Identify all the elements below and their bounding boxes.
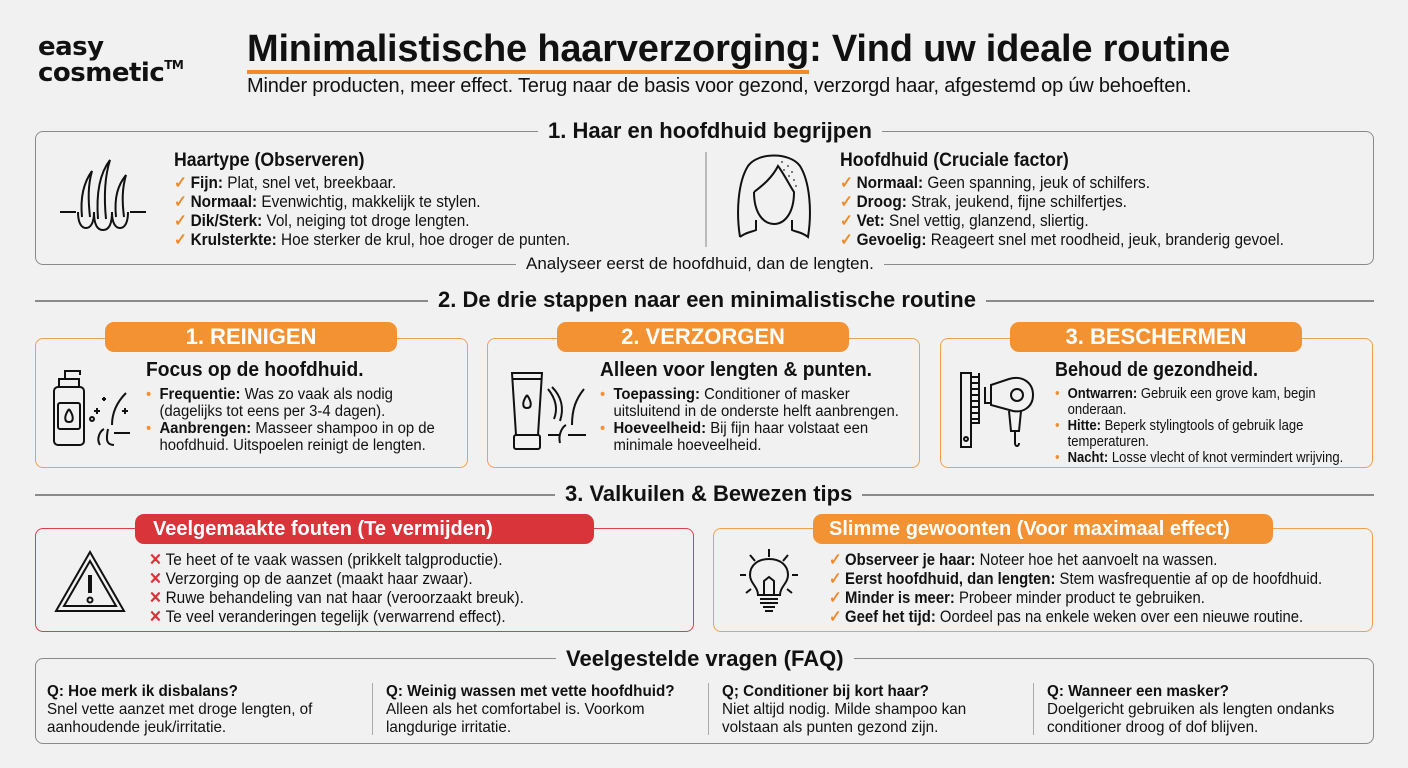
panel: step 1 [35, 338, 468, 468]
faq 3: Q; Conditioner bij kort haar? [722, 683, 929, 700]
list: mistakes: ✕Te veel veranderingen tegelijk (verwarrend effect). [149, 608, 506, 626]
text: haartype: Haartype (Observeren) [174, 150, 365, 171]
text: step 3: temperaturen. [1068, 434, 1149, 450]
title: Minimalistische haarverzorging: Vind uw ideale routine [247, 28, 1230, 70]
faq 4 [1047, 683, 1334, 736]
icon: comb and dryer [960, 372, 1034, 448]
tab: reinigen [105, 322, 397, 352]
text: hoofdhuid: ✓Normaal: Geen spanning, jeuk of schilfers. [840, 174, 1150, 192]
list: mistakes: ✕Te heet of te vaak wassen (prikkelt talgproductie). [149, 551, 503, 569]
faq 2 [386, 683, 675, 736]
text: step 1: (dagelijks tot eens per 3-4 dagen). [159, 403, 385, 420]
text: step 2: uitsluitend in de onderste helft aanbrengen. [613, 403, 899, 420]
icon: shampoo bottle [53, 370, 130, 446]
text: step 3 [1055, 359, 1343, 466]
text: step 2: Hoeveelheid: Bij fijn haar volstaat een [613, 420, 868, 437]
panel: step 3 [940, 338, 1373, 468]
text: step 1: Focus op de hoofdhuid. [146, 359, 364, 381]
list: tips: ✓Geef het tijd: Oordeel pas na enkele weken over een nieuwe routine. [829, 608, 1303, 626]
tab: beschermen [1010, 322, 1302, 352]
faq 4: conditioner droog of dof blijven. [1047, 719, 1258, 736]
text: hoofdhuid [840, 150, 1284, 249]
subtitle: Minder producten, meer effect. Terug naar de basis voor gezond, verzorgd haar, afgestemd op úw behoeften. [247, 75, 1191, 97]
text: step 2: Toepassing: Conditioner of masker [613, 386, 850, 403]
faq 1 [47, 683, 312, 736]
text: haartype [174, 150, 570, 249]
text: step 1: Aanbrengen: Masseer shampoo in op de [159, 420, 435, 437]
text: step 3: Ontwarren: Gebruik een grove kam, begin [1068, 386, 1316, 402]
text: step 2 [600, 359, 899, 454]
text: haartype: ✓Krulsterkte: Hoe sterker de krul, hoe droger de punten. [174, 231, 570, 249]
logo: cosmeticTM [38, 58, 183, 88]
heading: FAQ: Veelgestelde vragen (FAQ) [566, 646, 844, 671]
tab: verzorgen [557, 322, 849, 352]
logo: easy [38, 32, 104, 62]
text: step 1: hoofdhuid. Uitspoelen reinigt de lengten. [159, 437, 426, 454]
logo [38, 32, 183, 88]
text: step 3: Nacht: Losse vlecht of knot vermindert wrijving. [1068, 450, 1343, 466]
list: tips: ✓Eerst hoofdhuid, dan lengten: Stem wasfrequentie af op de hoofdhuid. [829, 570, 1322, 588]
icon: lightbulb [740, 549, 798, 612]
text: step 1 [146, 359, 435, 454]
faq 4: Doelgericht gebruiken als lengten ondanks [1047, 701, 1334, 718]
tab: reinigen: 1. REINIGEN [186, 324, 316, 349]
text: haartype: ✓Fijn: Plat, snel vet, breekbaar. [174, 174, 396, 192]
list: mistakes [149, 551, 524, 626]
faq 1: Q: Hoe merk ik disbalans? [47, 683, 238, 700]
text: hoofdhuid: Hoofdhuid (Cruciale factor) [840, 150, 1069, 171]
list: tips: ✓Minder is meer: Probeer minder product te gebruiken. [829, 589, 1205, 607]
text: step 3: onderaan. [1068, 402, 1126, 418]
heading: section 3: 3. Valkuilen & Bewezen tips [565, 481, 852, 506]
faq 2: Q: Weinig wassen met vette hoofdhuid? [386, 683, 675, 700]
text: haartype: ✓Normaal: Evenwichtig, makkelijk te stylen. [174, 193, 481, 211]
text: step 1: Frequentie: Was zo vaak als nodig [159, 386, 393, 403]
list: mistakes: ✕Ruwe behandeling van nat haar (veroorzaakt breuk). [149, 589, 524, 607]
tab: verzorgen: 2. VERZORGEN [621, 324, 785, 349]
panel: step 2 [487, 338, 920, 468]
tab: tips [813, 514, 1273, 544]
list: tips [829, 551, 1322, 626]
icon: face [737, 154, 811, 239]
faq 1: Snel vette aanzet met droge lengten, of [47, 701, 312, 718]
icon: warning [54, 550, 126, 612]
faq 3: volstaan als punten gezond zijn. [722, 719, 938, 736]
faq 3 [722, 683, 966, 736]
panel: tips [713, 528, 1373, 632]
faq 2: langdurige irritatie. [386, 719, 511, 736]
faq 1: aanhoudende jeuk/irritatie. [47, 719, 226, 736]
list: mistakes: ✕Verzorging op de aanzet (maakt haar zwaar). [149, 570, 473, 588]
text: hoofdhuid: ✓Gevoelig: Reageert snel met roodheid, jeuk, branderig gevoel. [840, 231, 1284, 249]
faq 3: Niet altijd nodig. Milde shampoo kan [722, 701, 966, 718]
faq 2: Alleen als het comfortabel is. Voorkom [386, 701, 645, 718]
text: hoofdhuid: ✓Droog: Strak, jeukend, fijne schilfertjes. [840, 193, 1127, 211]
tab: mistakes: Veelgemaakte fouten (Te vermijden) [153, 518, 493, 540]
panel: FAQ [35, 658, 1374, 744]
heading: section 1: 1. Haar en hoofdhuid begrijpen [548, 118, 872, 143]
faq 4: Q: Wanneer een masker? [1047, 683, 1229, 700]
tab: mistakes [135, 514, 594, 544]
text: step 3: Behoud de gezondheid. [1055, 359, 1258, 381]
note: analyse: Analyseer eerst de hoofdhuid, dan de lengten. [526, 254, 874, 273]
icon: tube [510, 372, 586, 450]
text: step 2: Alleen voor lengten & punten. [600, 359, 872, 381]
icon: hair follicles [60, 159, 146, 231]
list: tips: ✓Observeer je haar: Noteer hoe het aanvoelt na wassen. [829, 551, 1217, 569]
panel: section 1 [35, 131, 1374, 265]
text: step 2: minimale hoeveelheid. [613, 437, 762, 454]
text: haartype: ✓Dik/Sterk: Vol, neiging tot droge lengten. [174, 212, 470, 230]
tab: tips: Slimme gewoonten (Voor maximaal effect) [829, 518, 1230, 540]
panel: mistakes [35, 528, 694, 632]
text: hoofdhuid: ✓Vet: Snel vettig, glanzend, sliertig. [840, 212, 1089, 230]
tab: beschermen: 3. BESCHERMEN [1066, 324, 1246, 349]
heading: section 2: 2. De drie stappen naar een minimalistische routine [438, 287, 976, 312]
text: step 3: Hitte: Beperk stylingtools of gebruik lage [1068, 418, 1303, 434]
